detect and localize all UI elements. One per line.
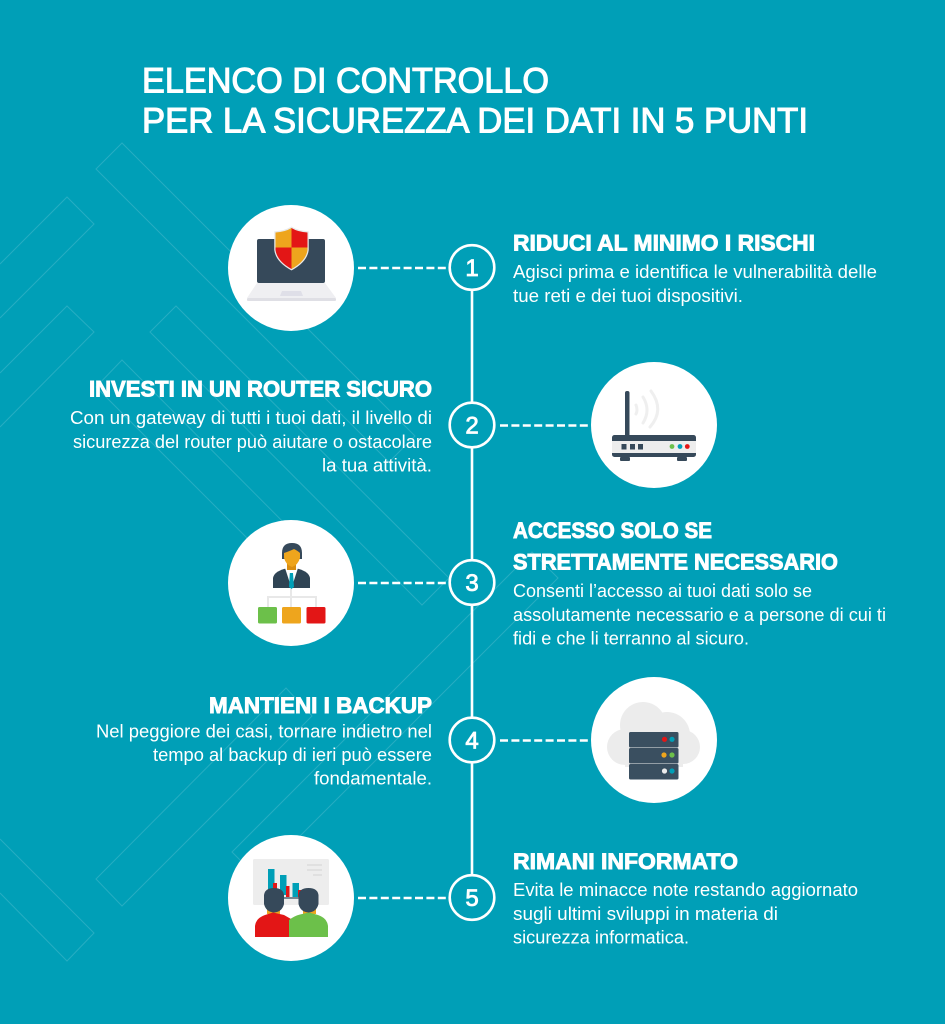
panel: step 3 text: STRETTAMENTE NECESSARIO (513, 550, 838, 574)
timeline: 4 (465, 728, 479, 754)
icon: cloud server (591, 677, 717, 803)
panel: step 2 text: INVESTI IN UN ROUTER SICURO (89, 376, 432, 402)
icon: team viewing charts (228, 835, 354, 961)
icon: person with hierarchy (228, 520, 354, 646)
title: PER LA SICUREZZA DEI DATI IN 5 PUNTI (142, 100, 808, 140)
panel: step 5 text (513, 849, 858, 948)
panel: step 5 text: sugli ultimi sviluppi in materia di (513, 904, 778, 924)
timeline (358, 245, 588, 920)
panel: step 1 text (513, 231, 877, 306)
panel: step 4 text (96, 693, 432, 788)
panel: step 3 text: ACCESSO SOLO SE (513, 518, 712, 543)
panel: step 1 text: RIDUCI AL MINIMO I RISCHI (513, 231, 815, 256)
timeline: 3 (465, 570, 479, 597)
panel: step 2 text: sicurezza del router può aiutare o ostacolare (73, 432, 432, 452)
panel: step 5 text: sicurezza informatica. (513, 928, 689, 948)
timeline: 5 (465, 885, 479, 912)
panel: step 4 text: Nel peggiore dei casi, tornare indietro nel (96, 722, 432, 742)
icon: router (591, 362, 717, 488)
timeline: 1 (465, 255, 479, 282)
panel: step 3 text (513, 518, 886, 648)
panel: step 2 text: Con un gateway di tutti i tuoi dati, il livello di (70, 408, 432, 428)
panel: step 4 text: tempo al backup di ieri può essere (153, 745, 432, 765)
panel: step 4 text: MANTIENI I BACKUP (209, 693, 432, 718)
title: ELENCO DI CONTROLLO (142, 60, 549, 100)
panel: step 2 text: la tua attività. (322, 456, 432, 476)
panel: step 3 text: assolutamente necessario e a persone di cui ti (513, 605, 886, 625)
timeline: 2 (465, 412, 479, 440)
panel: step 4 text: fondamentale. (314, 768, 432, 788)
panel: step 3 text: Consenti l’accesso ai tuoi dati solo se (513, 581, 812, 601)
panel: step 1 text: Agisci prima e identifica le vulnerabilità delle (513, 262, 877, 282)
icon: laptop with shield (228, 205, 354, 331)
panel: step 3 text: fidi e che li terranno al sicuro. (513, 628, 749, 648)
panel: step 1 text: tue reti e dei tuoi dispositivi. (513, 286, 743, 306)
title (142, 60, 808, 140)
panel: step 5 text: RIMANI INFORMATO (513, 849, 738, 874)
panel: step 5 text: Evita le minacce note restando aggiornato (513, 880, 858, 900)
panel: step 2 text (70, 376, 432, 476)
